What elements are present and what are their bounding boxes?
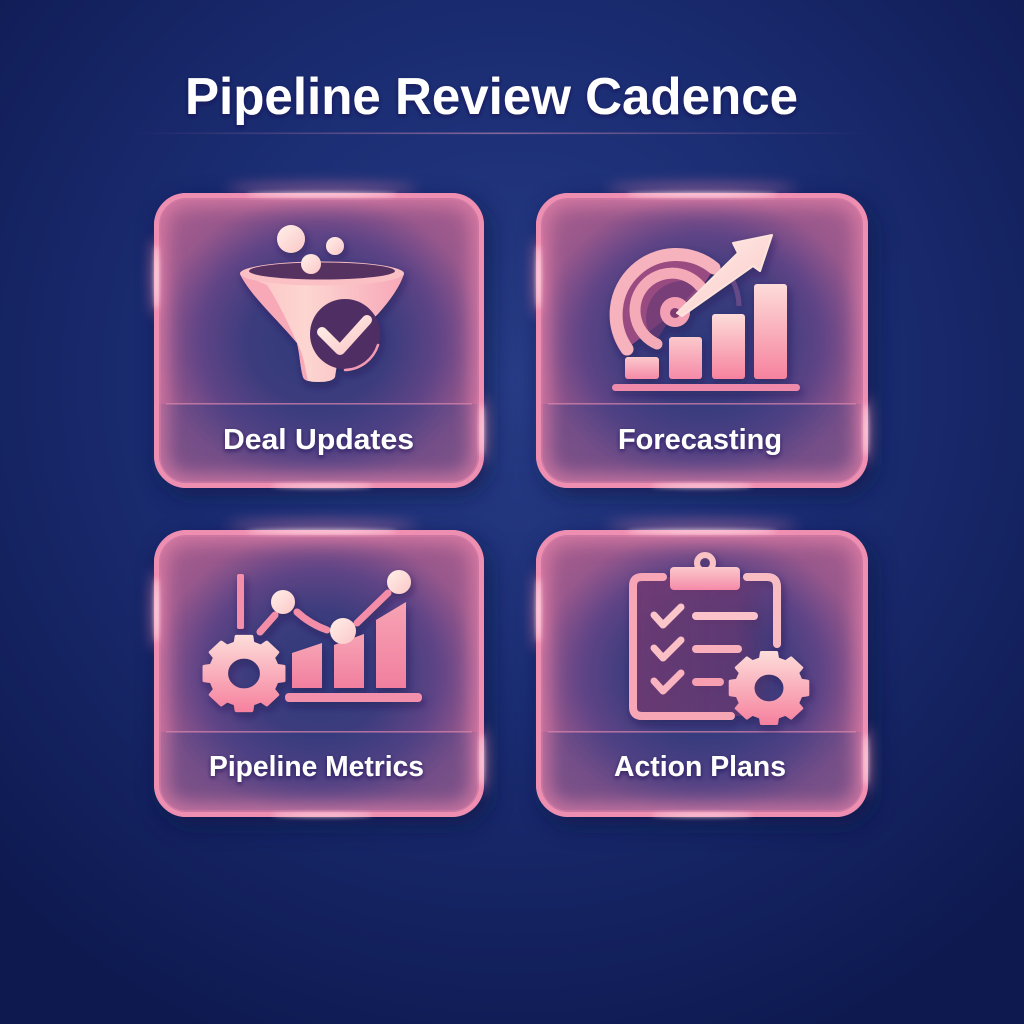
panel: action plans — [533, 521, 874, 825]
panel: forecasting — [533, 184, 874, 496]
label: deal updates: Deal Updates — [223, 424, 414, 456]
label: pipeline metrics: Pipeline Metrics — [209, 751, 424, 783]
title: Pipeline Review Cadence — [185, 68, 798, 126]
icon: funnel with check — [240, 225, 404, 382]
label: forecasting: Forecasting — [618, 424, 782, 456]
icon: gear and line-bar chart — [204, 570, 422, 711]
icon: clipboard checklist and gear — [633, 555, 808, 724]
label: action plans: Action Plans — [614, 751, 786, 783]
panel: deal updates — [151, 184, 490, 496]
icon: target, growth bars and arrow — [612, 235, 800, 391]
panel: pipeline metrics — [151, 521, 490, 825]
